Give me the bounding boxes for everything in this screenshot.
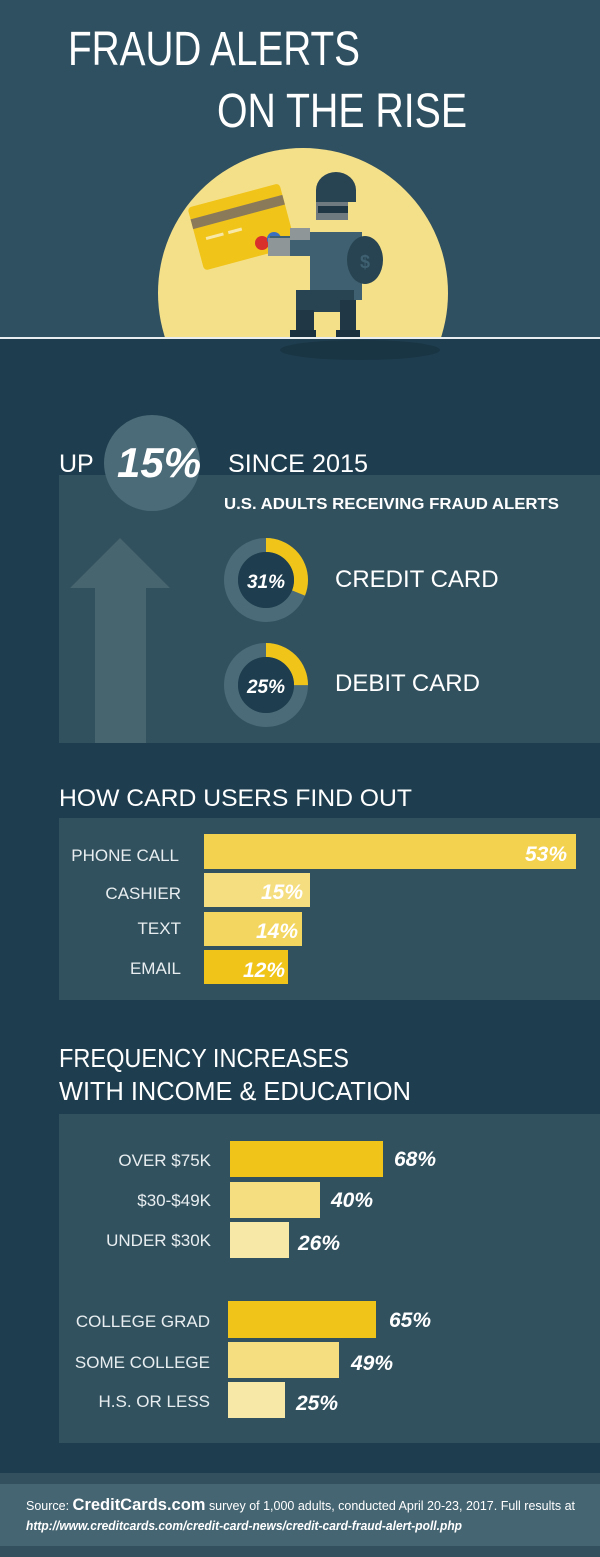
heading: how card users find out: HOW CARD USERS FIND OUT (59, 785, 412, 812)
donut: debit card 25%: 25% (246, 677, 285, 698)
footer band (0, 1473, 600, 1557)
heading: up 15% since 2015: SINCE 2015 (228, 450, 368, 478)
panel: bar chart find out (59, 818, 600, 1000)
illustration: sun and thief: $ (360, 252, 370, 272)
heading: frequency increases: WITH INCOME & EDUCATION (59, 1076, 411, 1106)
donut: credit card 31%: 31% (247, 572, 285, 593)
panel: income & education bars: 65% (389, 1309, 431, 1332)
panel: income & education bars: H.S. OR LESS (99, 1392, 210, 1411)
panel: bar chart find out: CASHIER (105, 884, 181, 903)
title: FRAUD ALERTS (68, 23, 360, 76)
panel: bar chart find out: PHONE CALL (71, 846, 179, 865)
panel: bar chart find out: TEXT (138, 919, 181, 938)
heading: up 15% since 2015: UP (59, 450, 94, 478)
heading: up 15% since 2015 (59, 439, 368, 486)
panel: income & education bars: 26% (297, 1232, 340, 1255)
panel: income & education bars: 25% (295, 1392, 338, 1415)
card (187, 183, 296, 271)
panel: income & education bars: $30-$49K (137, 1191, 212, 1210)
header background (0, 0, 600, 338)
panel: bar chart find out: 53% (525, 843, 567, 866)
heading: frequency increases: FREQUENCY INCREASES (59, 1043, 349, 1073)
panel: bar chart find out: 14% (256, 920, 298, 943)
panel: income & education bars: UNDER $30K (106, 1231, 212, 1250)
panel: income & education bars: SOME COLLEGE (75, 1353, 210, 1372)
panel: income & education bars (59, 1114, 600, 1443)
footer source (0, 1484, 600, 1546)
body (316, 172, 356, 202)
heading: up 15% since 2015: 15% (117, 439, 201, 486)
title: ON THE RISE (217, 85, 467, 138)
illustration: sun and thief (0, 148, 600, 360)
footer source: http://www.creditcards.com/credit-card-news/credit-card-fraud-alert-poll.php (26, 1518, 462, 1533)
footer source: Source: CreditCards.com survey of 1,000 adults, conducted April 20-23, 2017. Full results at (26, 1496, 576, 1514)
panel: since 2015 (59, 415, 600, 743)
donut: debit card 25%: DEBIT CARD (335, 670, 480, 697)
donut: debit card 25% (231, 650, 480, 720)
subheading: U.S. ADULTS RECEIVING FRAUD ALERTS (224, 496, 559, 513)
donut: credit card 31%: CREDIT CARD (335, 566, 499, 593)
circle 15% (104, 415, 200, 511)
icon: up arrow (70, 538, 170, 743)
panel: bar chart find out: EMAIL (130, 959, 181, 978)
heading: frequency increases (59, 1043, 411, 1106)
panel: bar chart find out: 15% (261, 881, 303, 904)
panel: income & education bars: 40% (330, 1189, 373, 1212)
panel: bar chart find out: 12% (243, 959, 285, 982)
panel: income & education bars: OVER $75K (118, 1151, 212, 1170)
panel: income & education bars: COLLEGE GRAD (76, 1312, 210, 1331)
title (68, 23, 467, 138)
panel: income & education bars: 68% (394, 1148, 436, 1171)
donut: credit card 31% (231, 545, 499, 615)
panel: income & education bars: 49% (350, 1352, 393, 1375)
